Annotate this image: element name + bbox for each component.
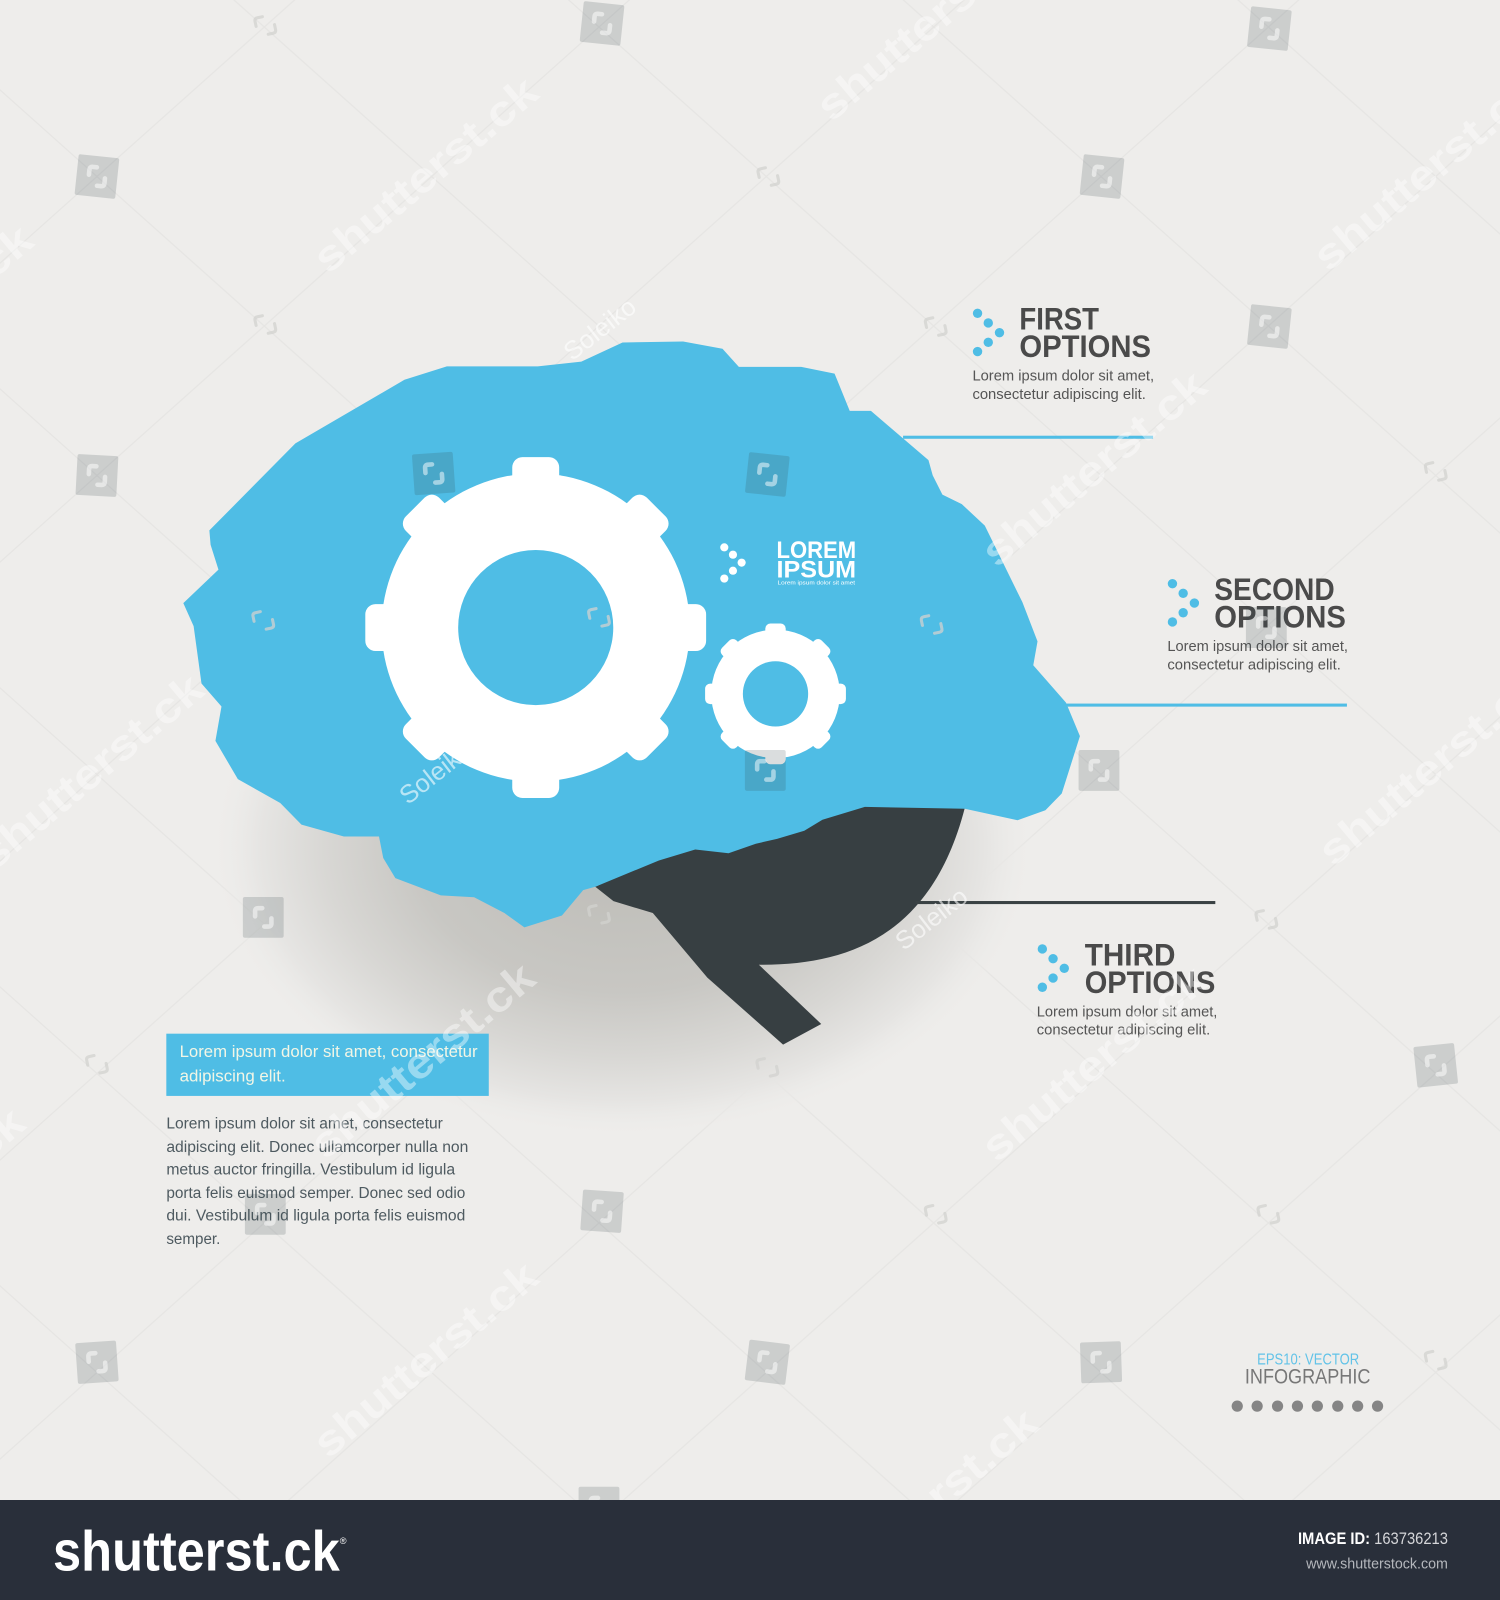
watermark: contributor names: Soleiko <box>559 293 642 366</box>
text: second description <box>1167 639 1348 673</box>
callout: second options <box>1167 571 1348 673</box>
text: second description: consectetur adipiscing elit. <box>1167 657 1341 673</box>
text: third description: Lorem ipsum dolor sit amet, <box>1037 1004 1217 1020</box>
text block: body copy: dui. Vestibulum id ligula porta felis euismod <box>166 1207 465 1224</box>
icon: large gear <box>365 457 706 798</box>
badge: eps10 vector infographic: EPS10: VECTOR <box>1257 1351 1359 1368</box>
icon: blue chevron dots <box>1038 944 1069 992</box>
footer band <box>0 1500 1500 1600</box>
leader line: third option <box>915 901 1215 904</box>
icon: white chevron dots in brain <box>720 543 746 583</box>
text: first description <box>972 369 1154 403</box>
watermark: shutterstock wordmarks: shutterst.ck <box>304 1252 548 1467</box>
watermark: contributor names <box>394 293 973 956</box>
watermark: contributor names: Soleiko <box>394 737 477 810</box>
text block: body copy: metus auctor fringilla. Vestibulum id ligula <box>166 1161 455 1178</box>
text block: body copy: porta felis euismod semper. Donec sed odio <box>166 1185 466 1202</box>
panel: blue intro box <box>166 1034 489 1096</box>
heading: second options: OPTIONS <box>1214 599 1346 635</box>
heading: first options: FIRST <box>1019 301 1099 337</box>
heading: third options: OPTIONS <box>1085 964 1215 1000</box>
watermark: shutterstock wordmarks: shutterst.ck <box>301 953 545 1168</box>
badge: eps10 vector infographic <box>1232 1351 1383 1412</box>
text: first description: consectetur adipiscing elit. <box>972 387 1146 403</box>
text block: body copy: semper. <box>166 1231 220 1248</box>
brain drop shadow <box>209 556 1036 1138</box>
heading: third options: THIRD <box>1085 936 1176 972</box>
text: intro <box>180 1043 478 1086</box>
text: third description: consectetur adipiscing elit. <box>1037 1023 1210 1039</box>
leader line: second option <box>1066 704 1347 707</box>
callout: first options <box>972 301 1154 403</box>
badge: eps10 vector infographic: INFOGRAPHIC <box>1245 1365 1370 1389</box>
callout: third options <box>1037 936 1217 1039</box>
heading: second options <box>1214 571 1346 635</box>
brain label: lorem ipsum: Lorem ipsum dolor sit amet <box>778 581 856 587</box>
text: intro: adipiscing elit. <box>180 1068 286 1086</box>
text block: body copy <box>166 1116 468 1248</box>
brain label: lorem ipsum: IPSUM <box>777 557 856 584</box>
heading: first options <box>1019 301 1151 364</box>
text: third description <box>1037 1004 1217 1039</box>
text: first description: Lorem ipsum dolor sit amet, <box>972 369 1154 385</box>
footer image id: IMAGE ID: 163736213 <box>1298 1530 1448 1548</box>
text: second description: Lorem ipsum dolor sit amet, <box>1167 639 1348 655</box>
dot row <box>1232 1401 1383 1412</box>
footer logo: shutterst.ck <box>53 1519 341 1582</box>
brain stem <box>595 798 965 1045</box>
icon: small gear <box>705 623 846 764</box>
text: intro: Lorem ipsum dolor sit amet, consectetur <box>180 1043 478 1061</box>
watermark: shutterstock wordmarks: shutterst.ck <box>972 361 1216 576</box>
brain shape <box>183 342 1080 927</box>
footer registered mark: ® <box>340 1536 347 1546</box>
text block: body copy: adipiscing elit. Donec ullamcorper nulla non <box>166 1139 468 1156</box>
brain label: lorem ipsum: LOREM <box>777 537 856 564</box>
heading: third options <box>1085 936 1215 1000</box>
watermark: contributor names: Soleiko <box>890 882 973 956</box>
icon: blue chevron dots <box>1168 579 1199 627</box>
brain label: lorem ipsum <box>777 537 856 587</box>
text block: body copy: Lorem ipsum dolor sit amet, consectetur <box>166 1116 443 1133</box>
heading: first options: OPTIONS <box>1019 328 1151 364</box>
watermark: shutterstock wordmarks: shutterst.ck <box>304 67 548 283</box>
footer url: www.shutterstock.com <box>1305 1556 1448 1572</box>
heading: second options: SECOND <box>1214 571 1335 607</box>
leader line: first option <box>903 436 1153 439</box>
icon: blue chevron dots <box>973 309 1004 356</box>
watermark: shutterstock wordmarks: shutterst.ck <box>972 956 1216 1171</box>
